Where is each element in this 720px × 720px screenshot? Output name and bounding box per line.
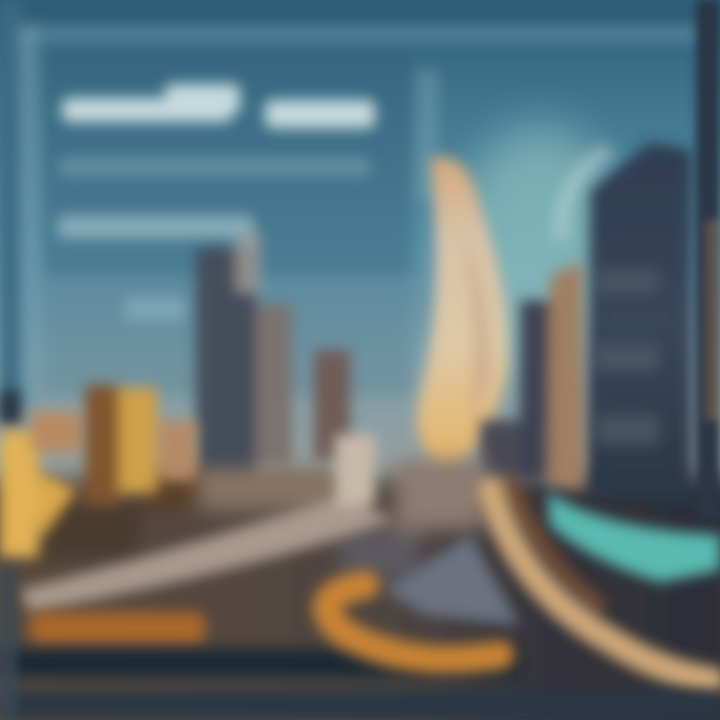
panel: translucent text frame [0, 0, 720, 420]
sky highlight arc [560, 150, 610, 240]
building: tan tower beside the dark tower [480, 262, 584, 490]
sky glow on the right [455, 125, 625, 375]
road: orange left strip [30, 612, 205, 644]
building: central curved tower [417, 157, 508, 472]
road: orange curved interchange [327, 480, 712, 680]
ground: mottled city haze [40, 460, 485, 580]
road: teal curved overpass [548, 492, 720, 582]
building: right dark tower [585, 142, 692, 505]
building: far right edge tower [696, 0, 720, 520]
building: mid-left towers [196, 232, 350, 478]
foreground: dark band under the roads [0, 648, 520, 678]
road: grey central plaza [385, 535, 520, 625]
building: left golden blocks [0, 385, 196, 557]
text block: blurred subtitle [58, 158, 370, 320]
ground: dark base across the lower third [0, 478, 720, 720]
heading: blurred title [62, 84, 375, 128]
foreground: left frame shadow [0, 565, 16, 720]
road: pale diagonal highway [20, 435, 395, 612]
foreground: dark lower strip [0, 690, 720, 720]
